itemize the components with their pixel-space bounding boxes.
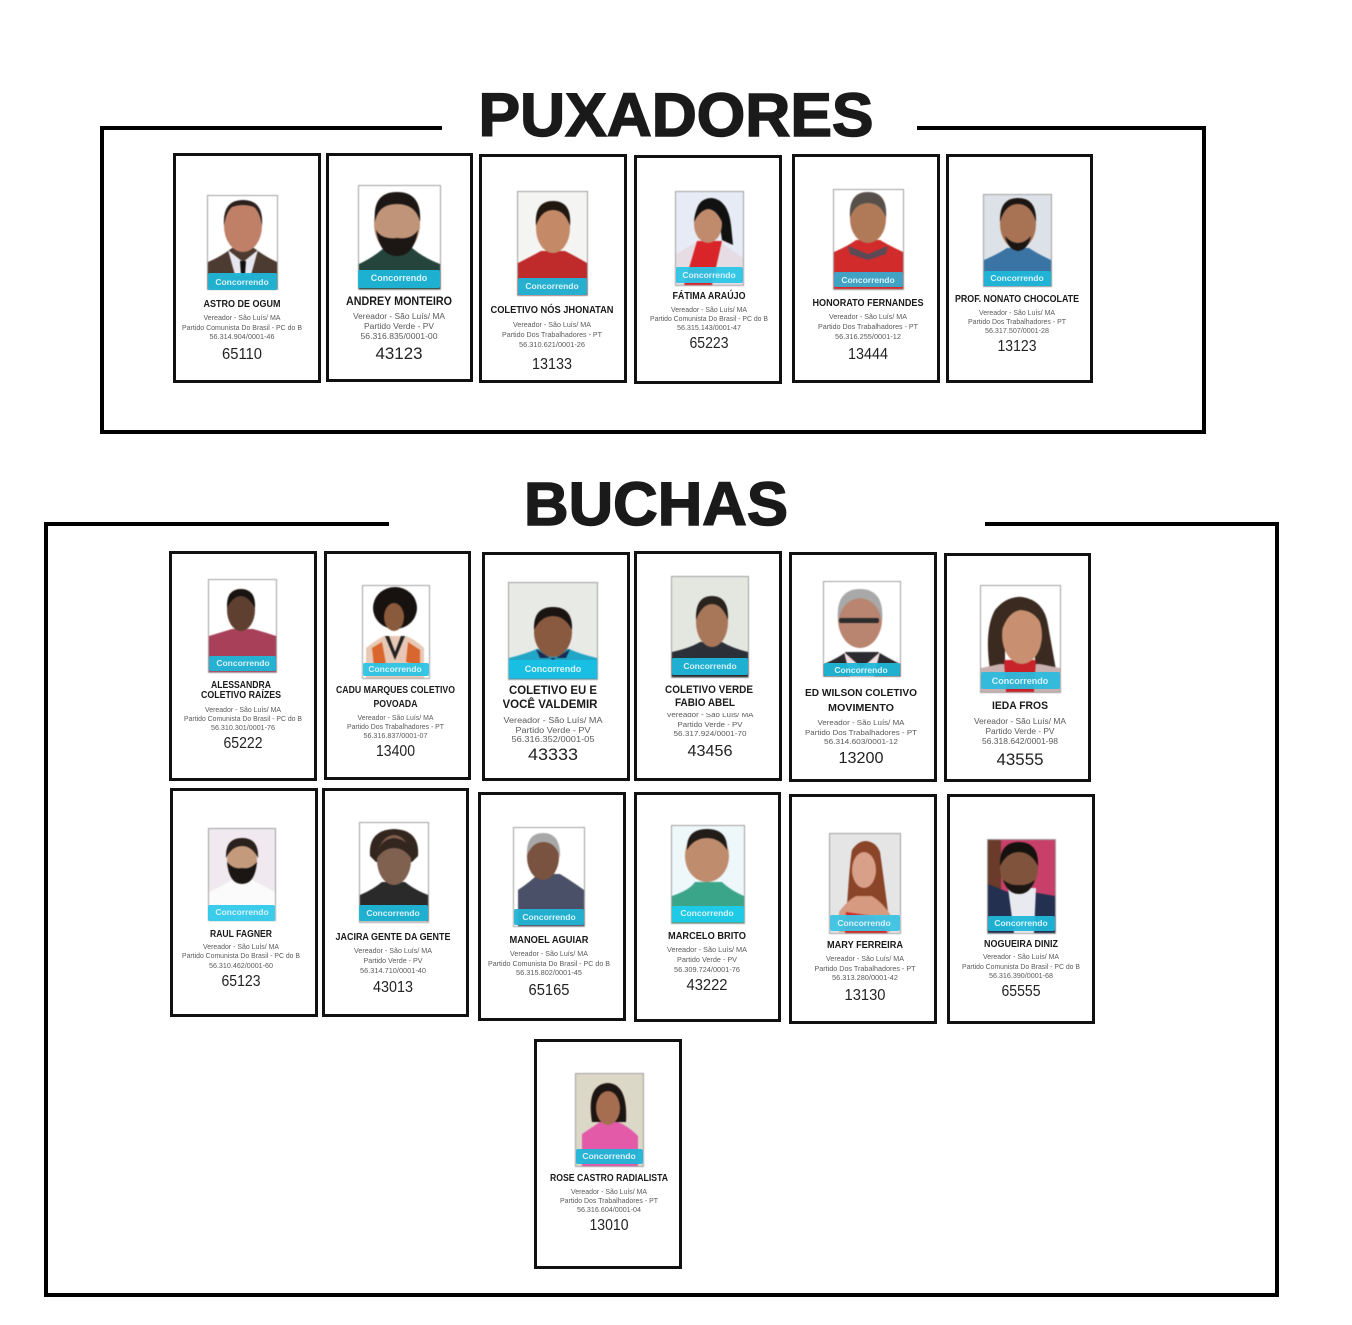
card: Ieda Fros: Partido Verde - PV: [986, 727, 1055, 736]
card: Manoel Aguiar: Partido Comunista Do Brasil - PC do B: [488, 959, 610, 968]
card: Manoel Aguiar: 65165: [528, 982, 570, 999]
card: Rose Castro Radialista: 13010: [590, 1217, 629, 1234]
portrait: Prof. Nonato Chocolate: [984, 194, 1052, 286]
card: Coletivo Eu e Você Valdemir: 43333: [528, 746, 578, 764]
portrait: Ed Wilson: [824, 582, 900, 676]
portrait: Manoel Aguiar: [514, 828, 584, 926]
card: Coletivo Nós Jhonatan: 56.310.621/0001-26: [519, 340, 585, 349]
card: Rose Castro Radialista: [536, 1040, 680, 1268]
panel frame: puxadores: [102, 128, 1204, 432]
card: Coletivo Nós Jhonatan: Concorrendo: [525, 281, 579, 291]
card: Ieda Fros: [946, 554, 1090, 780]
card: Cadu Marques Coletivo Povoada: POVOADA: [374, 698, 418, 710]
card: Astro de Ogum: [174, 154, 320, 382]
card: Coletivo Nós Jhonatan: COLETIVO NÓS JHONATAN: [490, 303, 614, 316]
card: Coletivo Verde Fabio Abel: 43456: [688, 743, 733, 760]
card: Astro de Ogum: Vereador - São Luís/ MA: [204, 313, 280, 322]
card: Coletivo Eu e Você Valdemir: 56.316.352/0001-05: [512, 735, 595, 744]
card: Cadu Marques Coletivo Povoada: CADU MARQUES COLETIVO: [336, 684, 455, 696]
card: Fátima Araújo: FÁTIMA ARAÚJO: [672, 289, 746, 302]
card: Ed Wilson Coletivo Movimento: Concorrendo: [834, 665, 888, 675]
card: Manoel Aguiar: Concorrendo: [522, 912, 576, 922]
card: Andrey Monteiro: ANDREY MONTEIRO: [346, 296, 452, 308]
card: Rose Castro Radialista: Concorrendo: [582, 1151, 636, 1161]
card: Raul Fagner: 56.310.462/0001-60: [209, 961, 273, 970]
card: Honorato Fernandes: 56.316.255/0001-12: [835, 332, 901, 341]
card: Ed Wilson Coletivo Movimento: Vereador - São Luís/ MA: [818, 718, 904, 727]
card: Nogueira Diniz: 65555: [1002, 983, 1040, 1000]
card: Mary Ferreira: MARY FERREIRA: [827, 939, 903, 951]
portrait: Fabio Abel: [672, 576, 748, 678]
card: Prof. Nonato Chocolate: Vereador - São Luís/ MA: [979, 308, 1055, 317]
card: Ed Wilson Coletivo Movimento: 56.314.603/0001-12: [824, 737, 898, 746]
card: Coletivo Verde Fabio Abel: [636, 552, 780, 780]
card: Nogueira Diniz: Concorrendo: [994, 918, 1048, 928]
card: Fátima Araújo: Concorrendo: [682, 270, 736, 280]
card: Raul Fagner: Vereador - São Luís/ MA: [203, 942, 279, 951]
portrait: Fátima Araújo: [676, 192, 744, 286]
card: Mary Ferreira: Concorrendo: [837, 918, 891, 928]
card: Nogueira Diniz: NOGUEIRA DINIZ: [984, 938, 1058, 950]
card: Prof. Nonato Chocolate: Concorrendo: [990, 273, 1044, 283]
card: Alessandra Coletivo Raízes: Vereador - São Luís/ MA: [205, 705, 281, 714]
card: Astro de Ogum: 56.314.904/0001-46: [210, 332, 274, 341]
portrait: Cadu Marques: [362, 586, 430, 678]
card: Marcelo Brito: Partido Verde - PV: [677, 955, 737, 964]
portrait: Alessandra: [208, 580, 276, 672]
card: Manoel Aguiar: [480, 794, 624, 1020]
card: Raul Fagner: Concorrendo: [215, 907, 269, 917]
card: Ed Wilson Coletivo Movimento: ED WILSON COLETIVO: [805, 687, 917, 699]
card: Jacira Gente da Gente: [324, 790, 468, 1016]
card: Cadu Marques Coletivo Povoada: Vereador - São Luís/ MA: [358, 713, 434, 722]
card: Honorato Fernandes: 13444: [848, 346, 888, 363]
card: Astro de Ogum: ASTRO DE OGUM: [204, 298, 281, 310]
card: Jacira Gente da Gente: 43013: [373, 979, 413, 996]
card: Coletivo Eu e Você Valdemir: Concorrendo: [525, 664, 582, 674]
card: Astro de Ogum: Partido Comunista Do Brasil - PC do B: [182, 323, 302, 332]
card: Nogueira Diniz: Vereador - São Luís/ MA: [983, 952, 1059, 961]
card: Alessandra Coletivo Raízes: COLETIVO RAÍZES: [201, 688, 281, 701]
card: Jacira Gente da Gente: Partido Verde - PV: [364, 956, 422, 965]
card: Ieda Fros: IEDA FROS: [992, 700, 1048, 712]
portrait: Rose Castro: [576, 1074, 644, 1166]
card: Coletivo Eu e Você Valdemir: Partido Verde - PV: [516, 726, 591, 735]
panel: buchas: [46, 470, 1277, 1295]
card: Coletivo Verde Fabio Abel: FABIO ABEL: [675, 697, 735, 709]
portrait: Ieda Fros: [980, 586, 1060, 692]
card: Mary Ferreira: 56.313.280/0001-42: [832, 973, 898, 982]
card: Alessandra Coletivo Raízes: 56.310.301/0001-76: [211, 723, 275, 732]
card: Ieda Fros: 56.318.642/0001-98: [982, 737, 1059, 746]
card: Coletivo Nós Jhonatan: Partido Dos Trabalhadores - PT: [502, 330, 602, 339]
card: Raul Fagner: [172, 790, 316, 1016]
portrait: Jacira: [360, 822, 428, 922]
card: Honorato Fernandes: Partido Dos Trabalhadores - PT: [818, 322, 918, 331]
card: Coletivo Verde Fabio Abel: 56.317.924/0001-70: [674, 729, 746, 738]
card: Alessandra Coletivo Raízes: Concorrendo: [216, 658, 270, 668]
card: Ed Wilson Coletivo Movimento: Partido Dos Trabalhadores - PT: [805, 728, 917, 737]
card: Marcelo Brito: 43222: [686, 977, 728, 994]
card: Mary Ferreira: [790, 796, 936, 1022]
card: Alessandra Coletivo Raízes: 65222: [224, 735, 262, 752]
card: Raul Fagner: Partido Comunista Do Brasil - PC do B: [182, 951, 300, 960]
portrait: Mary Ferreira: [830, 834, 900, 934]
card: Marcelo Brito: Vereador - São Luís/ MA: [667, 945, 747, 954]
card: Mary Ferreira: 13130: [844, 987, 886, 1004]
card: Coletivo Eu e Você Valdemir: [484, 554, 628, 780]
portrait: Marcelo Brito: [672, 826, 744, 924]
card: Fátima Araújo: Partido Comunista Do Brasil - PC do B: [650, 314, 768, 323]
card: Prof. Nonato Chocolate: Partido Dos Trabalhadores - PT: [968, 317, 1066, 326]
card: Astro de Ogum: Concorrendo: [215, 277, 269, 287]
card: Raul Fagner: RAUL FAGNER: [210, 928, 272, 940]
panel: puxadores: [102, 81, 1204, 432]
white strip over clipped line: [660, 710, 760, 713]
card: Ed Wilson Coletivo Movimento: 13200: [838, 750, 884, 767]
card: Nogueira Diniz: 56.316.390/0001-68: [989, 971, 1053, 980]
card: Prof. Nonato Chocolate: 56.317.507/0001-28: [985, 326, 1049, 335]
card: Marcelo Brito: MARCELO BRITO: [668, 930, 746, 942]
card: Fátima Araújo: Vereador - São Luís/ MA: [671, 305, 747, 314]
card: Marcelo Brito: Concorrendo: [680, 908, 734, 918]
card: Andrey Monteiro: Vereador - São Luís/ MA: [353, 312, 446, 321]
card: Rose Castro Radialista: Partido Dos Trabalhadores - PT: [560, 1196, 658, 1205]
portrait: Andrey Monteiro: [358, 186, 440, 290]
card: Coletivo Verde Fabio Abel: COLETIVO VERDE: [665, 684, 753, 696]
portrait: Nogueira Diniz: [988, 840, 1056, 934]
portrait: Astro de Ogum: [208, 196, 278, 290]
card: Fátima Araújo: 65223: [690, 335, 728, 352]
card: Coletivo Nós Jhonatan: 13133: [532, 356, 572, 373]
card: Jacira Gente da Gente: Concorrendo: [366, 908, 420, 918]
card: Marcelo Brito: 56.309.724/0001-76: [674, 965, 740, 974]
card: Astro de Ogum: 65110: [222, 346, 262, 363]
card: Cadu Marques Coletivo Povoada: Concorrendo: [368, 664, 422, 674]
card: Prof. Nonato Chocolate: [948, 156, 1092, 382]
card: Nogueira Diniz: Partido Comunista Do Brasil - PC do B: [962, 962, 1080, 971]
card: Alessandra Coletivo Raízes: Partido Comunista Do Brasil - PC do B: [184, 714, 302, 723]
card: Cadu Marques Coletivo Povoada: 56.316.837/0001-07: [364, 731, 428, 740]
card: Jacira Gente da Gente: JACIRA GENTE DA GENTE: [336, 931, 450, 943]
card: Mary Ferreira: Vereador - São Luís/ MA: [826, 954, 904, 963]
card: Nogueira Diniz: [948, 796, 1094, 1022]
card: Rose Castro Radialista: 56.316.604/0001-04: [577, 1205, 641, 1214]
card: Andrey Monteiro: [328, 154, 472, 380]
card: Manoel Aguiar: MANOEL AGUIAR: [510, 934, 589, 946]
card: Ed Wilson Coletivo Movimento: [790, 554, 936, 780]
card: Coletivo Nós Jhonatan: Vereador - São Luís/ MA: [513, 320, 591, 329]
card: Raul Fagner: 65123: [222, 973, 260, 990]
card: Coletivo Eu e Você Valdemir: Vereador - São Luís/ MA: [504, 716, 603, 725]
card: Coletivo Verde Fabio Abel: Concorrendo: [683, 661, 737, 671]
card: Mary Ferreira: Partido Dos Trabalhadores - PT: [814, 964, 916, 973]
card: Coletivo Verde Fabio Abel: Partido Verde - PV: [678, 720, 742, 729]
card: Manoel Aguiar: 56.315.802/0001-45: [516, 968, 582, 977]
card: Prof. Nonato Chocolate: 13123: [998, 338, 1036, 355]
card: Jacira Gente da Gente: 56.314.710/0001-40: [360, 966, 426, 975]
card: Coletivo Nós Jhonatan: [480, 156, 626, 382]
card: Honorato Fernandes: HONORATO FERNANDES: [812, 297, 924, 309]
card: Marcelo Brito: [636, 794, 780, 1020]
card: Coletivo Eu e Você Valdemir: VOCÊ VALDEMIR: [502, 698, 598, 711]
title: PUXADORES: PUXADORES: [478, 81, 874, 149]
card: Coletivo Verde Fabio Abel: Vereador - São Luís/ MA: [666, 710, 754, 719]
card: Cadu Marques Coletivo Povoada: Partido Dos Trabalhadores - PT: [347, 722, 444, 731]
card: Cadu Marques Coletivo Povoada: 13400: [376, 743, 415, 760]
card: Rose Castro Radialista: Vereador - São Luís/ MA: [571, 1187, 647, 1196]
portrait: Raul Fagner: [208, 828, 276, 920]
card: Andrey Monteiro: 43123: [376, 345, 422, 363]
card: Honorato Fernandes: [794, 156, 938, 382]
card: Cadu Marques Coletivo Povoada: [326, 552, 470, 778]
card: Prof. Nonato Chocolate: PROF. NONATO CHOCOLATE: [955, 293, 1079, 305]
card: Rose Castro Radialista: ROSE CASTRO RADIALISTA: [550, 1172, 668, 1184]
card: Honorato Fernandes: Concorrendo: [841, 275, 895, 285]
card: Andrey Monteiro: Partido Verde - PV: [364, 322, 435, 331]
portrait: Valdemir: [508, 582, 598, 680]
card: Alessandra Coletivo Raízes: ALESSANDRA: [211, 679, 271, 691]
card: Fátima Araújo: [636, 156, 780, 382]
card: Manoel Aguiar: Vereador - São Luís/ MA: [510, 949, 588, 958]
card: Jacira Gente da Gente: Vereador - São Luís/ MA: [354, 946, 432, 955]
card: Ed Wilson Coletivo Movimento: MOVIMENTO: [828, 702, 894, 714]
card: Andrey Monteiro: Concorrendo: [371, 273, 428, 283]
card: Ieda Fros: Concorrendo: [992, 676, 1049, 686]
card: Coletivo Eu e Você Valdemir: COLETIVO EU E: [509, 685, 597, 697]
card: Andrey Monteiro: 56.316.835/0001-00: [360, 332, 438, 341]
card: Honorato Fernandes: Vereador - São Luís/ MA: [829, 312, 907, 321]
white strip over clipped name: [490, 698, 503, 710]
panel frame: buchas: [46, 524, 1277, 1295]
title: BUCHAS: BUCHAS: [524, 470, 788, 538]
card: Alessandra Coletivo Raízes: [170, 552, 316, 780]
card: Ieda Fros: 43555: [996, 751, 1044, 769]
card: Fátima Araújo: 56.315.143/0001-47: [677, 323, 741, 332]
portrait: Coletivo Nós Jhonatan: [518, 192, 588, 296]
portrait: Honorato Fernandes: [834, 190, 904, 290]
card: Ieda Fros: Vereador - São Luís/ MA: [974, 717, 1067, 726]
